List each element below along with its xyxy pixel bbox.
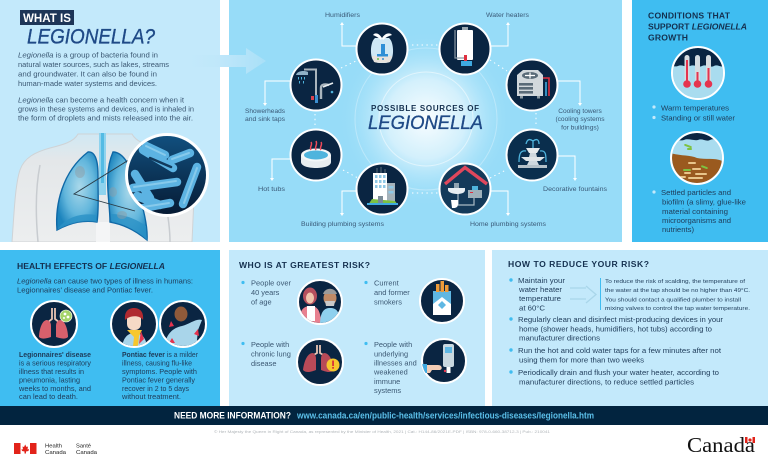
list item: over 40: People over: [251, 278, 292, 288]
icon: lungs with warning: [297, 339, 343, 385]
list item: run taps: using them for more than two weeks: [519, 356, 644, 364]
list item: water heater temperature: temperature: [519, 294, 561, 303]
list: warm and still water: Standing or still water: [661, 114, 736, 122]
right lung: [108, 152, 147, 240]
torso: [12, 134, 195, 242]
panel: possible sources: [190, 0, 622, 242]
source: showerheads and sink taps: Showerheads: [245, 108, 286, 115]
heading: who is at risk: WHO IS AT GREATEST RISK?: [239, 260, 370, 270]
list item: water heater temperature: at 60°C: [519, 304, 546, 312]
text block: Pontiac fever: symptoms. People with: [122, 367, 197, 376]
text block: Pontiac fever: [121, 350, 198, 401]
text block: Legionnaires' disease: pneumonia, lasting: [19, 376, 80, 384]
text block: definition: natural water sources, such as lakes, streams: [18, 60, 169, 69]
text block: health concern: Legionella can become a health concern when it: [18, 96, 184, 104]
source: showerheads and sink taps: [245, 60, 342, 123]
source: cooling towers: [506, 60, 605, 132]
icon: building: [367, 167, 398, 205]
text block: Legionnaires' disease: can lead to death.: [19, 392, 78, 401]
text block: Pontiac fever: illness, causing flu-like: [122, 358, 192, 368]
icon: thermometers: [670, 45, 726, 99]
panel: health effects: [0, 250, 220, 406]
panel: conditions that support growth: [632, 0, 768, 242]
list item: smokers: smokers: [374, 298, 402, 306]
list item: over 40: of age: [251, 298, 272, 306]
text block: intro: Legionnaires' disease and Pontiac fever.: [17, 286, 153, 294]
list item: smokers: [364, 278, 410, 306]
list item: flush heater: [509, 368, 719, 386]
heading: Legionella?: LEGIONELLA?: [27, 26, 155, 48]
callout: scalding note: To reduce the risk of scalding, the temperature of: [605, 279, 745, 285]
icon: settled particles: [670, 132, 724, 185]
illustration: torso with lungs and bacteria: [12, 133, 208, 242]
list item: weakened immune systems: systems: [374, 386, 401, 395]
source: humidifiers: Humidifiers: [325, 12, 361, 19]
icon: infected lungs: [31, 301, 77, 347]
heading: conditions: [648, 10, 747, 42]
source: water heaters: Water heaters: [486, 12, 530, 19]
pointer lines: [73, 160, 136, 212]
text block: health concern: [18, 96, 194, 122]
list item: over 40: 40 years: [251, 288, 280, 297]
list item: weakened immune systems: underlying: [374, 350, 408, 358]
dotted connecting ring: [315, 45, 536, 193]
icon: person with muscle aches: [160, 301, 206, 350]
icon: cooling unit: [517, 70, 549, 98]
heading: conditions: GROWTH: [648, 32, 688, 42]
text block: definition: [18, 50, 169, 88]
text block: Pontiac fever: without treatment.: [121, 392, 181, 401]
list: settled particles and biofilm: nutrients): [662, 225, 694, 234]
heading: conditions: CONDITIONS THAT: [648, 10, 731, 20]
logo: Health Canada: Canada: [45, 450, 67, 456]
list item: run taps: [509, 346, 721, 364]
source: decorative fountains: [506, 130, 608, 193]
text block: Pontiac fever: Pontiac fever is a milder: [122, 350, 198, 359]
list item: chronic lung disease: [241, 340, 291, 368]
heading: possible sources of: POSSIBLE SOURCES OF: [371, 104, 479, 113]
list item: weakened immune systems: illnesses and: [374, 358, 417, 368]
list item: over 40: [241, 278, 292, 306]
panel: what is Legionella: [0, 0, 220, 242]
icon: hot tub: [301, 141, 331, 168]
callout: scalding note: the water at the tap should be no higher than 49°C.: [605, 288, 750, 294]
bacteria magnifier: [126, 134, 208, 216]
list item: clean devices: home (shower heads, humidifiers, hot tubs) according to: [519, 324, 712, 334]
icon: house plumbing: [445, 168, 487, 208]
source: home plumbing systems: Home plumbing systems: [470, 221, 547, 228]
source: home plumbing systems: [440, 164, 547, 228]
callout: scalding note: [600, 278, 750, 312]
source: cooling towers: (cooling systems: [555, 116, 605, 123]
text block: intro: Legionella can cause two types of illness in humans:: [17, 276, 193, 286]
source: hot tubs: [258, 130, 342, 193]
list: settled particles and biofilm: material containing: [662, 207, 728, 216]
list: settled particles and biofilm: microorganisms and: [662, 216, 731, 225]
list item: weakened immune systems: [364, 340, 417, 395]
list item: chronic lung disease: chronic lung: [251, 350, 291, 358]
text block: definition: human-made water systems and devices.: [18, 79, 157, 88]
list item: chronic lung disease: People with: [251, 340, 289, 349]
text block: definition: and groundwater. It can also be found in: [18, 70, 157, 78]
icon: humidifier: [371, 33, 393, 63]
list item: weakened immune systems: weakened: [373, 368, 408, 376]
list item: flush heater: Periodically drain and flush your water heater, according to: [518, 368, 719, 377]
icon: blood glucose meter: [420, 339, 466, 383]
text block: Legionnaires' disease: [18, 350, 91, 401]
heading: reduce risk: HOW TO REDUCE YOUR RISK?: [508, 259, 649, 269]
heading: Legionella: LEGIONELLA: [368, 113, 483, 134]
text block: intro: [17, 276, 193, 294]
list item: water heater temperature: Maintain your: [518, 276, 566, 285]
list item: run taps: Run the hot and cold water taps for a few minutes after not: [518, 346, 721, 355]
logo: Health Canada: Health: [45, 444, 62, 450]
list item: weakened immune systems: People with: [374, 340, 412, 349]
arrow: [190, 48, 266, 74]
list item: weakened immune systems: immune: [374, 377, 400, 386]
logo: Health Canada: Santé: [76, 444, 91, 450]
text block: Pontiac fever: recover in 2 to 5 days: [122, 384, 189, 393]
source: building plumbing systems: Building plumbing systems: [301, 221, 385, 228]
logo: Health Canada: [14, 443, 98, 456]
source: cooling towers: for buildings): [561, 124, 599, 132]
list item: clean devices: Regularly clean and disinfect mist-producing devices in your: [518, 315, 724, 324]
centre glow: [338, 31, 514, 207]
text block: definition: Legionella is a group of bacteria found in: [18, 50, 158, 60]
list item: water heater temperature: [509, 276, 566, 312]
text block: health concern: grows in these systems and devices, and is inhaled in: [18, 104, 194, 114]
source: decorative fountains: Decorative fountains: [543, 186, 608, 193]
list item: smokers: Current: [374, 278, 399, 288]
list item: water heater temperature: water heater: [518, 285, 563, 294]
list item: chronic lung disease: disease: [251, 359, 276, 368]
text block: Legionnaires' disease: illness that results in: [19, 367, 84, 376]
list: settled particles and biofilm: biofilm (a slimy, glue-like: [662, 198, 746, 206]
heading: health effects: HEALTH EFFECTS OF LEGIONELLA: [17, 261, 165, 271]
copyright line: © Her Majesty the Queen in Right of Canada, as represented by the Minister of Health, 2021 | Cat.: H144-86/2021E-PDF | ISBN: 978-0-660-38712-3 | Pub.: 210041: [214, 430, 550, 434]
source: cooling towers: Cooling towers: [558, 108, 603, 115]
callout: scalding note: mixing valves to control the tap water temperature.: [605, 306, 750, 312]
banner: need more information: NEED MORE INFORMATION?: [174, 410, 291, 420]
list item: flush heater: manufacturer directions, to reduce settled particles: [519, 378, 694, 386]
icon: water heater: [455, 27, 473, 66]
panel: who is at greatest risk: [229, 250, 485, 406]
text block: Legionnaires' disease: Legionnaires' disease: [19, 350, 91, 359]
callout: scalding note: You should contact a qualified plumber to install: [605, 298, 741, 304]
heading: what is: WHAT IS: [23, 11, 71, 25]
list: settled particles and biofilm: Settled particles and: [661, 188, 731, 197]
logo: Canada wordmark: Canada: [687, 433, 756, 457]
icon: shower and tap: [296, 70, 333, 103]
source: hot tubs: Hot tubs: [258, 186, 286, 193]
icon: older adults: [298, 280, 342, 325]
banner: need more information: www.canada.ca/en/public-health/services/infectious-diseases/legionella.htm: [296, 410, 594, 420]
text block: Legionnaires' disease: weeks to months, and: [18, 384, 91, 393]
banner: need more information: [0, 406, 768, 425]
list: warm and still water: Warm temperatures: [661, 104, 729, 112]
source: humidifiers: [325, 12, 408, 74]
icon: fountain: [518, 140, 547, 168]
icon: person with flu: [111, 301, 157, 350]
arrow: chevron: [570, 286, 596, 303]
text block: Pontiac fever: Pontiac fever generally: [122, 376, 195, 384]
list: settled particles and biofilm: [652, 188, 746, 234]
text block: health concern: the form of droplets and mists released into the air.: [18, 114, 193, 122]
left lung: [57, 152, 98, 230]
panel: how to reduce your risk: [492, 250, 768, 406]
logo: Health Canada: Canada: [76, 450, 98, 456]
icon: cigarette pack: [420, 279, 464, 323]
text block: Legionnaires' disease: is a serious respiratory: [19, 358, 91, 368]
list: warm and still water: [652, 104, 736, 122]
heading: conditions: SUPPORT LEGIONELLA: [648, 22, 747, 32]
source: showerheads and sink taps: and sink taps: [245, 116, 286, 123]
list item: clean devices: manufacturer directions: [519, 334, 600, 342]
list item: clean devices: [509, 315, 724, 342]
source: water heaters: [440, 12, 530, 74]
list item: smokers: and former: [374, 288, 410, 297]
source: building plumbing systems: [301, 164, 408, 228]
